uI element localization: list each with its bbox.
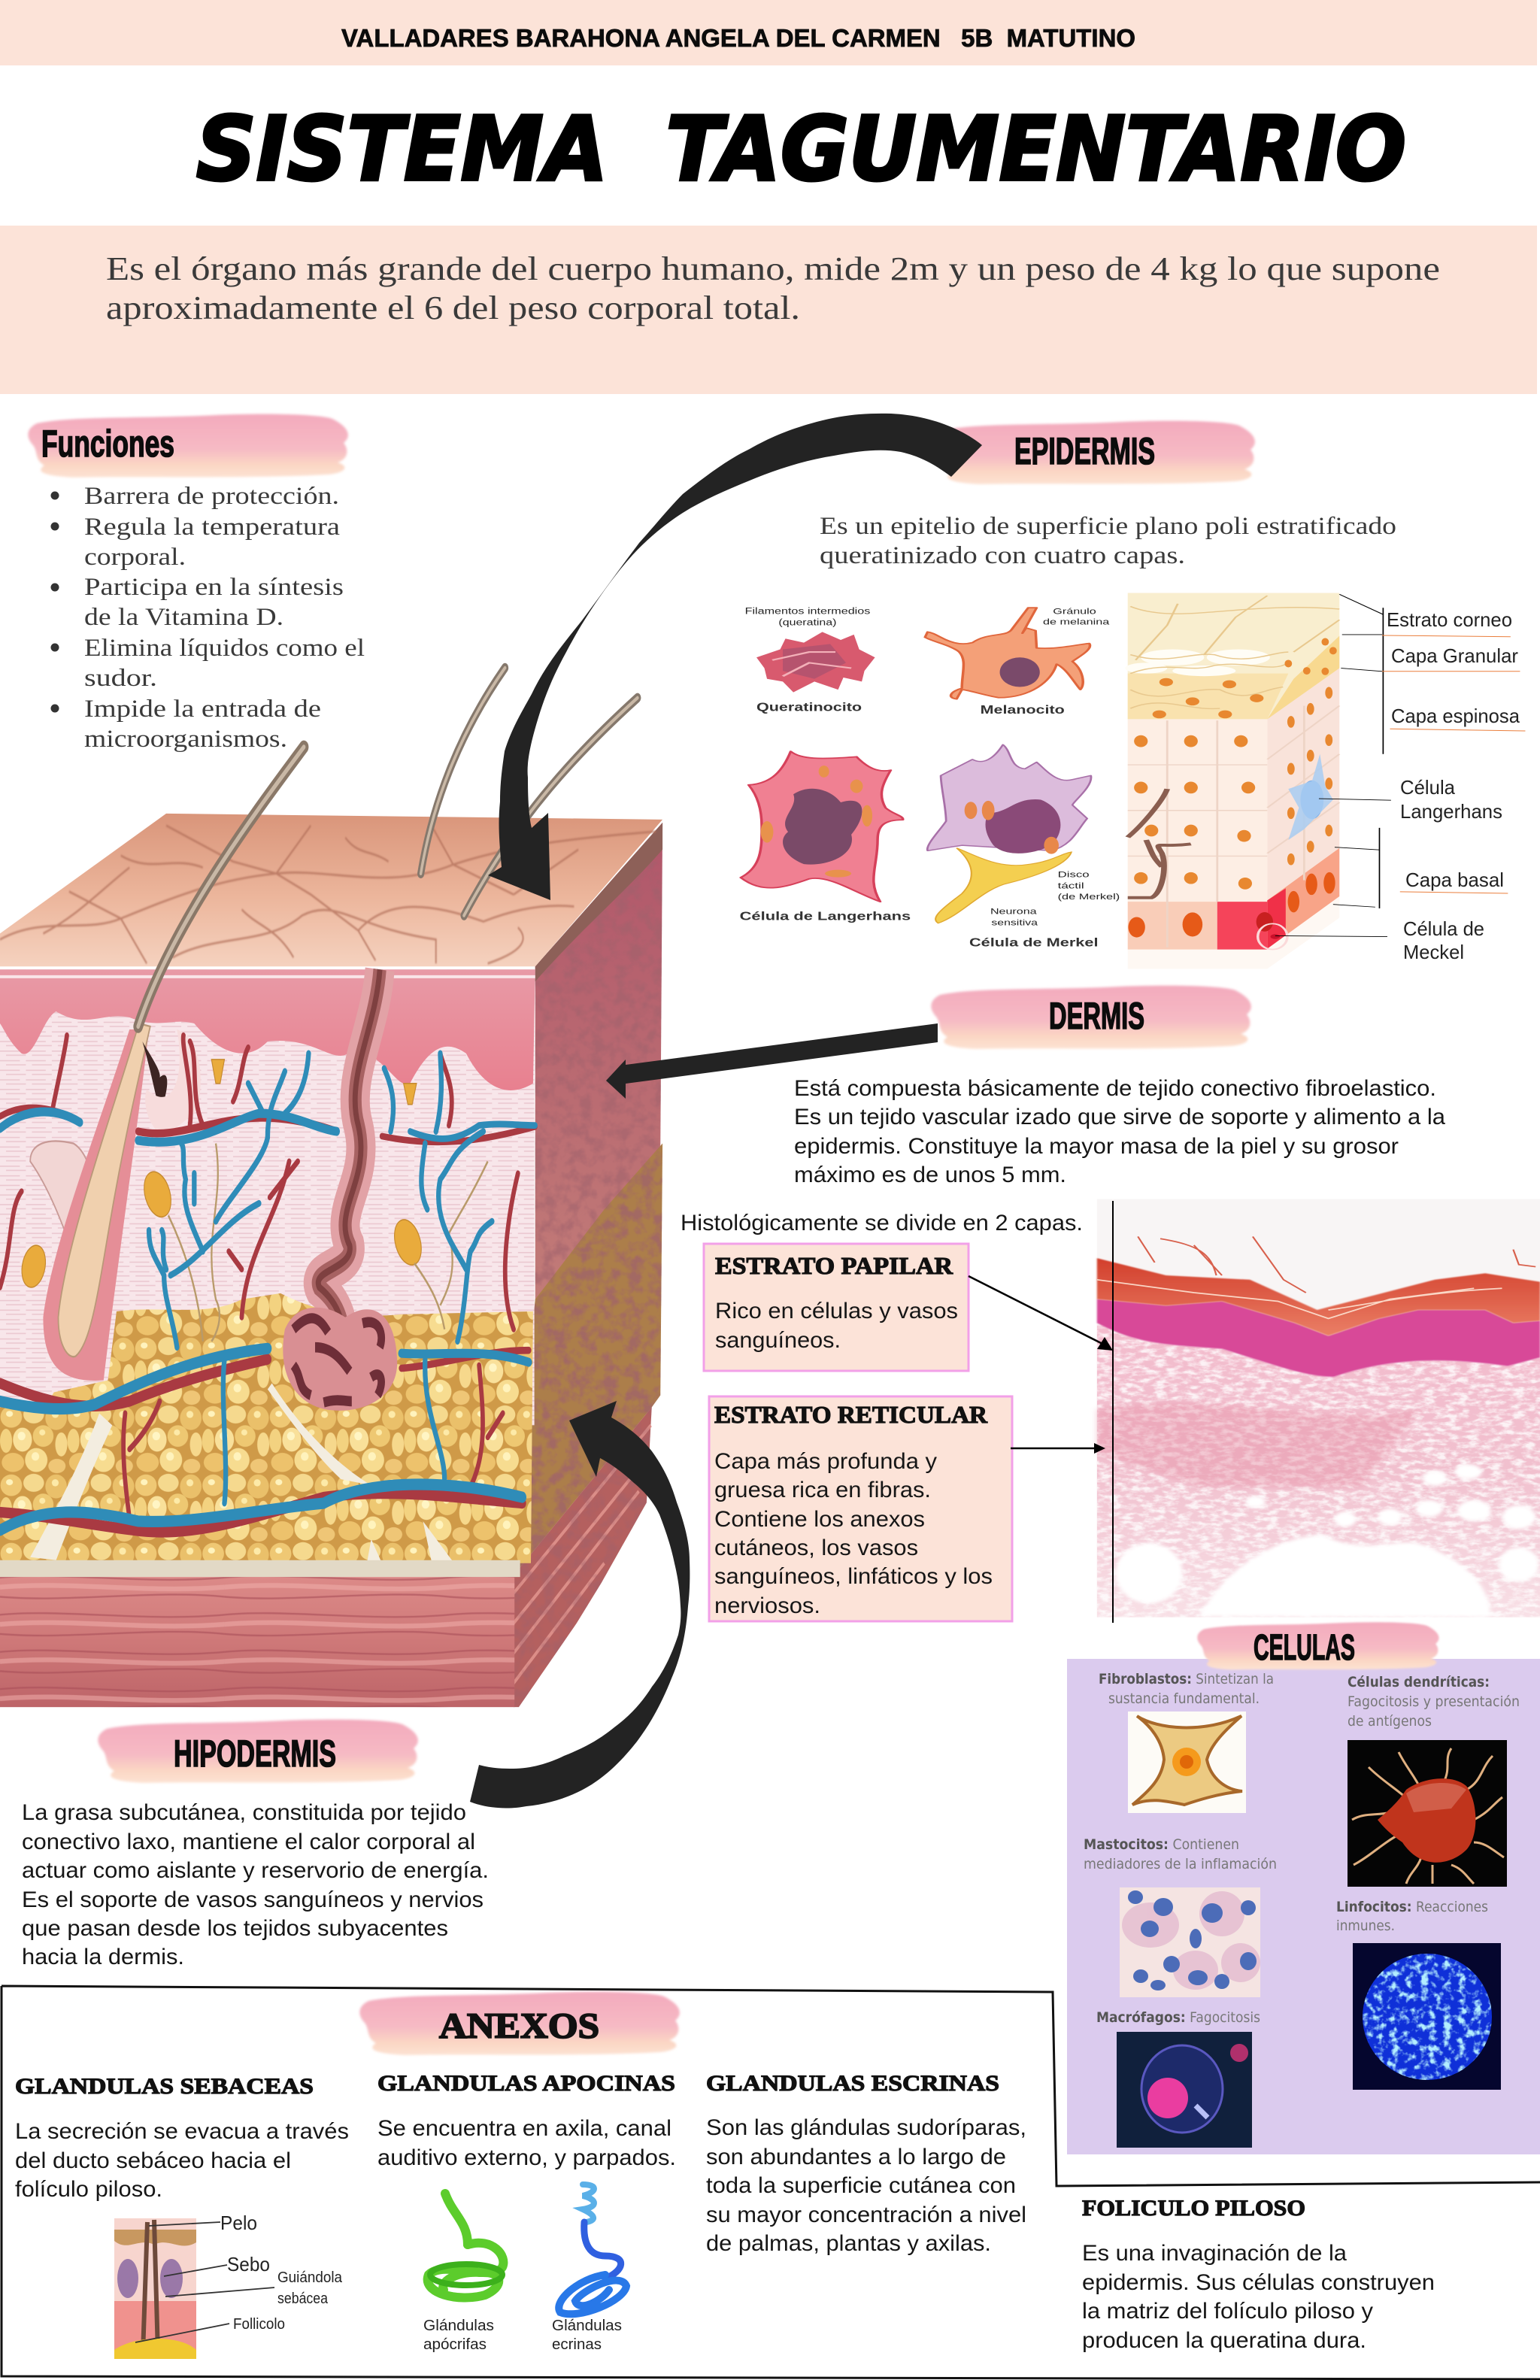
intro text	[106, 250, 1440, 326]
column: glandulas sebaceas: folículo piloso.	[15, 2177, 162, 2202]
diagram: sebaceous gland: Pelo	[220, 2212, 257, 2234]
labels: glands: Glándulas	[423, 2318, 494, 2334]
box: estrato papilar: Rico en células y vasos	[715, 1299, 958, 1323]
heading: hipodermis: HIPODERMIS	[174, 1733, 336, 1775]
heading: dermis	[931, 986, 1251, 1049]
text: fibroblastos	[1099, 1671, 1274, 1707]
panel: celulas	[1067, 1622, 1540, 2154]
epidermis description	[820, 513, 1396, 569]
column: foliculo piloso: la matriz del folículo piloso y	[1082, 2299, 1373, 2324]
labels: epidermis layers: Langerhans	[1400, 800, 1502, 823]
intro text: aproximadamente el 6 del peso corporal total.	[106, 290, 800, 326]
arrow: hipodermis to skin	[470, 1401, 690, 1808]
box: estrato reticular: ESTRATO RETICULAR	[714, 1401, 988, 1428]
column: glandulas apocinas: GLANDULAS APOCINAS	[377, 2071, 675, 2096]
column: glandulas sebaceas: GLANDULAS SEBACEAS	[15, 2074, 314, 2099]
heading: dermis: DERMIS	[1049, 995, 1144, 1037]
title: SISTEMA TAGUMENTARIO	[196, 97, 1406, 201]
text: fibroblastos: sustancia fundamental.	[1108, 1690, 1260, 1707]
labels: glands: apócrifas	[423, 2336, 487, 2353]
cell: melanocito: Melanocito	[981, 704, 1065, 717]
text: fibroblastos: Fibroblastos: Sintetizan la	[1099, 1671, 1274, 1687]
cell: queratinocito: Queratinocito	[756, 701, 862, 714]
diagram: sebaceous gland: Guiándola	[277, 2269, 343, 2286]
photo: skin histology	[1097, 1199, 1540, 1617]
image: mast cells	[1120, 1887, 1260, 1997]
text: celulas dendriticas	[1348, 1674, 1520, 1730]
labels: epidermis layers: Célula de	[1403, 917, 1484, 940]
cell: melanocito: de melanina	[1043, 617, 1109, 626]
panel: dermis	[681, 986, 1540, 1623]
panel: anexos	[15, 1992, 1435, 2359]
heading: funciones: Funciones	[41, 423, 174, 465]
muscle layer	[0, 1560, 520, 1707]
heading: anexos: ANEXOS	[439, 2006, 599, 2046]
labels: glands: ecrinas	[552, 2336, 602, 2353]
dermis description: epidermis. Constituye la mayor masa de la piel y su grosor	[794, 1134, 1399, 1159]
panel: introduction	[0, 226, 1537, 394]
heading: celulas	[1197, 1622, 1439, 1669]
cell: queratinocito: Filamentos intermedios	[745, 606, 870, 617]
box: estrato reticular: gruesa rica en fibras.	[714, 1478, 931, 1502]
heading: anexos	[359, 1992, 680, 2055]
dermis description: Está compuesta básicamente de tejido conectivo fibroelastico.	[794, 1076, 1436, 1101]
text: mastocitos	[1084, 1836, 1277, 1872]
text: celulas dendriticas: de antígenos	[1348, 1713, 1432, 1730]
veins	[0, 1054, 535, 1530]
function list: Elimina líquidos como el	[84, 635, 365, 662]
cell: merkel: Célula de Merkel	[969, 936, 1099, 949]
cell: melanocito	[925, 606, 1109, 717]
column: foliculo piloso	[1082, 2196, 1435, 2353]
function list	[51, 483, 365, 753]
line: histology marker	[1112, 1201, 1114, 1623]
box: estrato papilar: sanguíneos.	[715, 1328, 841, 1353]
labels: epidermis layers: Estrato corneo	[1387, 608, 1512, 631]
hipodermis description: Es el soporte de vasos sanguíneos y nervios	[22, 1887, 484, 1912]
image: fibroblast	[1128, 1711, 1246, 1813]
heading: hipodermis	[98, 1720, 418, 1783]
dermis layer	[0, 969, 535, 1425]
cell: merkel	[927, 744, 1120, 949]
dermis description	[794, 1076, 1445, 1187]
illustration: skin cross-section block	[0, 668, 662, 1707]
cell: merkel: (de Merkel)	[1058, 892, 1120, 902]
panel: funciones	[28, 414, 365, 753]
text: linfocitos: Linfocitos: Reacciones	[1336, 1899, 1488, 1915]
hairs	[138, 668, 638, 1026]
function list: Participa en la síntesis	[84, 574, 344, 601]
text: celulas dendriticas: Células dendríticas:	[1348, 1674, 1490, 1690]
right side face	[514, 823, 662, 1707]
icon: apocrine gland	[428, 2194, 503, 2298]
epidermis description: Es un epitelio de superficie plano poli estratificado	[820, 513, 1396, 540]
cell: merkel: Disco	[1058, 869, 1090, 879]
labels: epidermis layers	[1275, 594, 1525, 963]
column: foliculo piloso: epidermis. Sus células construyen	[1082, 2270, 1435, 2295]
arteries	[0, 1035, 535, 1533]
intro text: Es el órgano más grande del cuerpo humano, mide 2m y un peso de 4 kg lo que supone	[106, 250, 1440, 287]
hipodermis description	[22, 1800, 489, 1969]
diagram: sebaceous gland: Follicolo	[233, 2316, 285, 2333]
diagram: sebaceous gland	[114, 2212, 343, 2359]
box: estrato papilar: ESTRATO PAPILAR	[715, 1252, 953, 1279]
text: celulas dendriticas: Fagocitosis y presentación	[1348, 1693, 1520, 1710]
panel: epidermis	[740, 421, 1525, 969]
hipodermis description: conectivo laxo, mantiene el calor corporal al	[22, 1830, 475, 1854]
arrow: epidermis to skin	[488, 414, 982, 900]
labels: epidermis layers: Capa basal	[1405, 869, 1504, 891]
labels: epidermis layers: Meckel	[1403, 941, 1464, 963]
text: mastocitos: Mastocitos: Contienen	[1084, 1836, 1239, 1853]
heading: epidermis: EPIDERMIS	[1014, 430, 1155, 472]
hair follicle	[43, 1023, 201, 1381]
arrow: papilar to histology	[969, 1276, 1113, 1351]
column: glandulas escrinas: toda la superficie cutánea con	[706, 2173, 1016, 2198]
column: glandulas escrinas: son abundantes a lo largo de	[706, 2145, 1006, 2169]
arrector muscle	[30, 1141, 96, 1287]
column: glandulas apocinas	[377, 2071, 676, 2170]
column: glandulas sebaceas	[15, 2074, 349, 2202]
top skin surface	[0, 814, 662, 966]
text: mastocitos: mediadores de la inflamación	[1084, 1856, 1277, 1872]
icon: eccrine gland	[559, 2184, 626, 2314]
column: glandulas escrinas: de palmas, plantas y axilas.	[706, 2231, 991, 2256]
diagram: sebaceous gland: sebácea	[277, 2291, 329, 2307]
function list: microorganismos.	[84, 726, 287, 753]
text: linfocitos: inmunes.	[1336, 1918, 1395, 1934]
column: glandulas apocinas: auditivo externo, y parpados.	[377, 2145, 676, 2170]
labels: epidermis layers: Célula	[1400, 776, 1456, 799]
column: glandulas escrinas: GLANDULAS ESCRINAS	[706, 2071, 999, 2096]
cell illustrations	[740, 593, 1339, 969]
cell: merkel: Neurona	[990, 906, 1037, 916]
arrow: reticular to histology	[1011, 1443, 1105, 1454]
diagram: sebaceous gland: Sebo	[227, 2253, 270, 2275]
author line: VALLADARES BARAHONA ANGELA DEL CARMEN 5B MATUTINO	[341, 24, 1135, 52]
hipodermis description: actuar como aislante y reservorio de energía.	[22, 1858, 489, 1883]
heading: funciones	[28, 414, 348, 478]
cell: queratinocito: (queratina)	[778, 617, 836, 628]
function list: sudor.	[84, 665, 157, 692]
panel: top author band	[0, 0, 1537, 65]
text: histologic division: Histológicamente se divide en 2 capas.	[681, 1211, 1083, 1235]
box: estrato reticular	[709, 1396, 1012, 1621]
heading: celulas: CELULAS	[1254, 1628, 1355, 1668]
nerves	[168, 1144, 488, 1342]
function list: Regula la temperatura	[84, 514, 340, 541]
box: estrato reticular: cutáneos, los vasos	[714, 1536, 918, 1560]
box: estrato reticular: sanguíneos, linfáticos y los	[714, 1564, 993, 1589]
heading: epidermis	[935, 421, 1255, 484]
dermis description: Es un tejido vascular izado que sirve de soporte y alimento a la	[794, 1105, 1445, 1129]
cell: merkel: táctil	[1058, 881, 1084, 890]
panel: hipodermis	[22, 1720, 489, 1969]
image: macrophage	[1117, 2032, 1252, 2148]
function list: de la Vitamina D.	[84, 604, 283, 631]
box: estrato papilar	[704, 1244, 969, 1371]
column: foliculo piloso: FOLICULO PILOSO	[1082, 2196, 1305, 2221]
hipodermis description: La grasa subcutánea, constituida por tejido	[22, 1800, 466, 1825]
column: glandulas apocinas: Se encuentra en axila, canal	[377, 2116, 671, 2141]
column: glandulas sebaceas: La secreción se evacua a través	[15, 2119, 349, 2144]
column: glandulas escrinas: su mayor concentración a nivel	[706, 2203, 1026, 2227]
hipodermis description: hacia la dermis.	[22, 1945, 184, 1969]
image: dendritic cell	[1348, 1740, 1507, 1887]
oil glands	[18, 1060, 426, 1292]
epidermis layer	[0, 969, 535, 1090]
function list: corporal.	[84, 544, 186, 571]
column: glandulas escrinas: Son las glándulas sudoríparas,	[706, 2115, 1026, 2140]
cell: melanocito: Gránulo	[1053, 606, 1096, 616]
column: foliculo piloso: producen la queratina dura.	[1082, 2328, 1366, 2353]
cell: merkel: sensitiva	[991, 917, 1038, 927]
text: macrofagos: Macrófagos: Fagocitosis	[1096, 2009, 1260, 2026]
cell: queratinocito	[745, 606, 875, 714]
subcutaneous fat layer	[0, 1293, 533, 1563]
illustration: epidermis layers block	[1125, 593, 1339, 969]
text: linfocitos	[1336, 1899, 1488, 1934]
labels: glands: Glándulas	[552, 2318, 622, 2334]
cell: langerhans: Célula de Langerhans	[740, 910, 911, 923]
labels: epidermis layers: Capa Granular	[1391, 644, 1518, 667]
frame: anexos outline	[2, 1986, 1540, 2379]
column: glandulas escrinas	[706, 2071, 1026, 2256]
column: glandulas sebaceas: del ducto sebáceo hacia el	[15, 2148, 291, 2173]
box: estrato reticular: Contiene los anexos	[714, 1507, 925, 1532]
image: lymphocyte	[1353, 1943, 1501, 2090]
function list: Impide la entrada de	[84, 696, 321, 723]
epidermis description: queratinizado con cuatro capas.	[820, 542, 1185, 569]
box: estrato reticular: nerviosos.	[714, 1593, 820, 1618]
sweat gland and duct	[318, 969, 380, 1342]
column: foliculo piloso: Es una invaginación de la	[1082, 2241, 1347, 2266]
sweat gland coil	[283, 1308, 397, 1411]
cell: langerhans	[740, 751, 911, 923]
labels: glands	[423, 2318, 622, 2353]
dermis description: máximo es de unos 5 mm.	[794, 1163, 1066, 1187]
hipodermis description: que pasan desde los tejidos subyacentes	[22, 1916, 448, 1941]
box: estrato reticular: Capa más profunda y	[714, 1449, 937, 1474]
arrow: dermis to skin	[606, 1023, 938, 1099]
labels: epidermis layers: Capa espinosa	[1391, 705, 1520, 727]
function list: Barrera de protección.	[84, 483, 339, 510]
